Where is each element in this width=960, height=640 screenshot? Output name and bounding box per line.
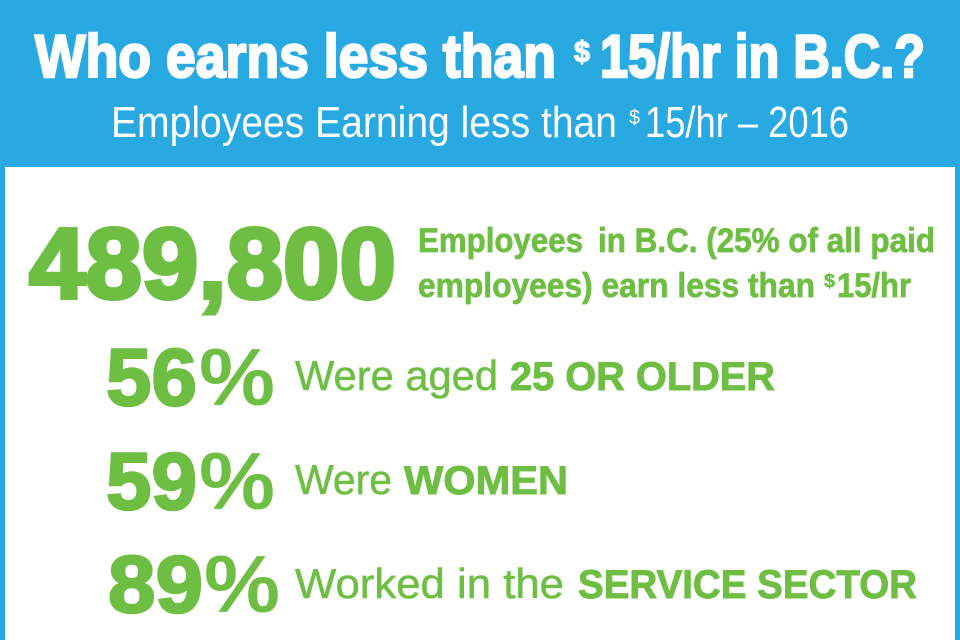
statistic: 59% women: %	[199, 437, 275, 527]
subtitle: 15/hr – 2016	[645, 98, 849, 147]
title: Who earns less than	[35, 23, 556, 90]
statistic: 56% aged 25 or older: Were aged	[295, 352, 498, 399]
statistic: 489,800 employees: $	[824, 271, 835, 291]
statistic: 89% service sector	[108, 540, 917, 630]
statistic: 89% service sector: %	[204, 540, 280, 630]
statistic: 59% women: Were	[295, 456, 392, 503]
statistic: 89% service sector: Worked in the	[295, 560, 564, 607]
title: $	[574, 36, 590, 69]
white content panel	[5, 167, 955, 640]
statistic: 489,800 employees: Employees	[418, 222, 583, 260]
header band	[0, 0, 960, 167]
statistic: 489,800 employees: 489,800	[29, 208, 396, 320]
statistic: 89% service sector: SERVICE SECTOR	[578, 563, 917, 607]
statistic: 56% aged 25 or older: %	[199, 333, 275, 423]
statistic: 56% aged 25 or older: 56	[106, 333, 197, 423]
statistic: 489,800 employees: 15/hr	[837, 267, 911, 305]
statistic: 59% women	[106, 437, 568, 527]
title	[35, 23, 925, 90]
statistic: 56% aged 25 or older	[106, 333, 775, 423]
statistic: 489,800 employees: employees) earn less than	[418, 267, 815, 305]
statistic: 489,800 employees	[29, 208, 935, 320]
subtitle: Employees Earning less than	[111, 98, 617, 147]
statistic: 59% women: 59	[106, 437, 197, 527]
statistic: 56% aged 25 or older: 25 OR OLDER	[510, 355, 775, 399]
subtitle: $	[629, 107, 640, 129]
statistic: 59% women: WOMEN	[404, 459, 568, 503]
statistic: 89% service sector: 89	[108, 540, 203, 630]
statistic: 489,800 employees: in B.C. (25% of all paid	[598, 222, 935, 260]
